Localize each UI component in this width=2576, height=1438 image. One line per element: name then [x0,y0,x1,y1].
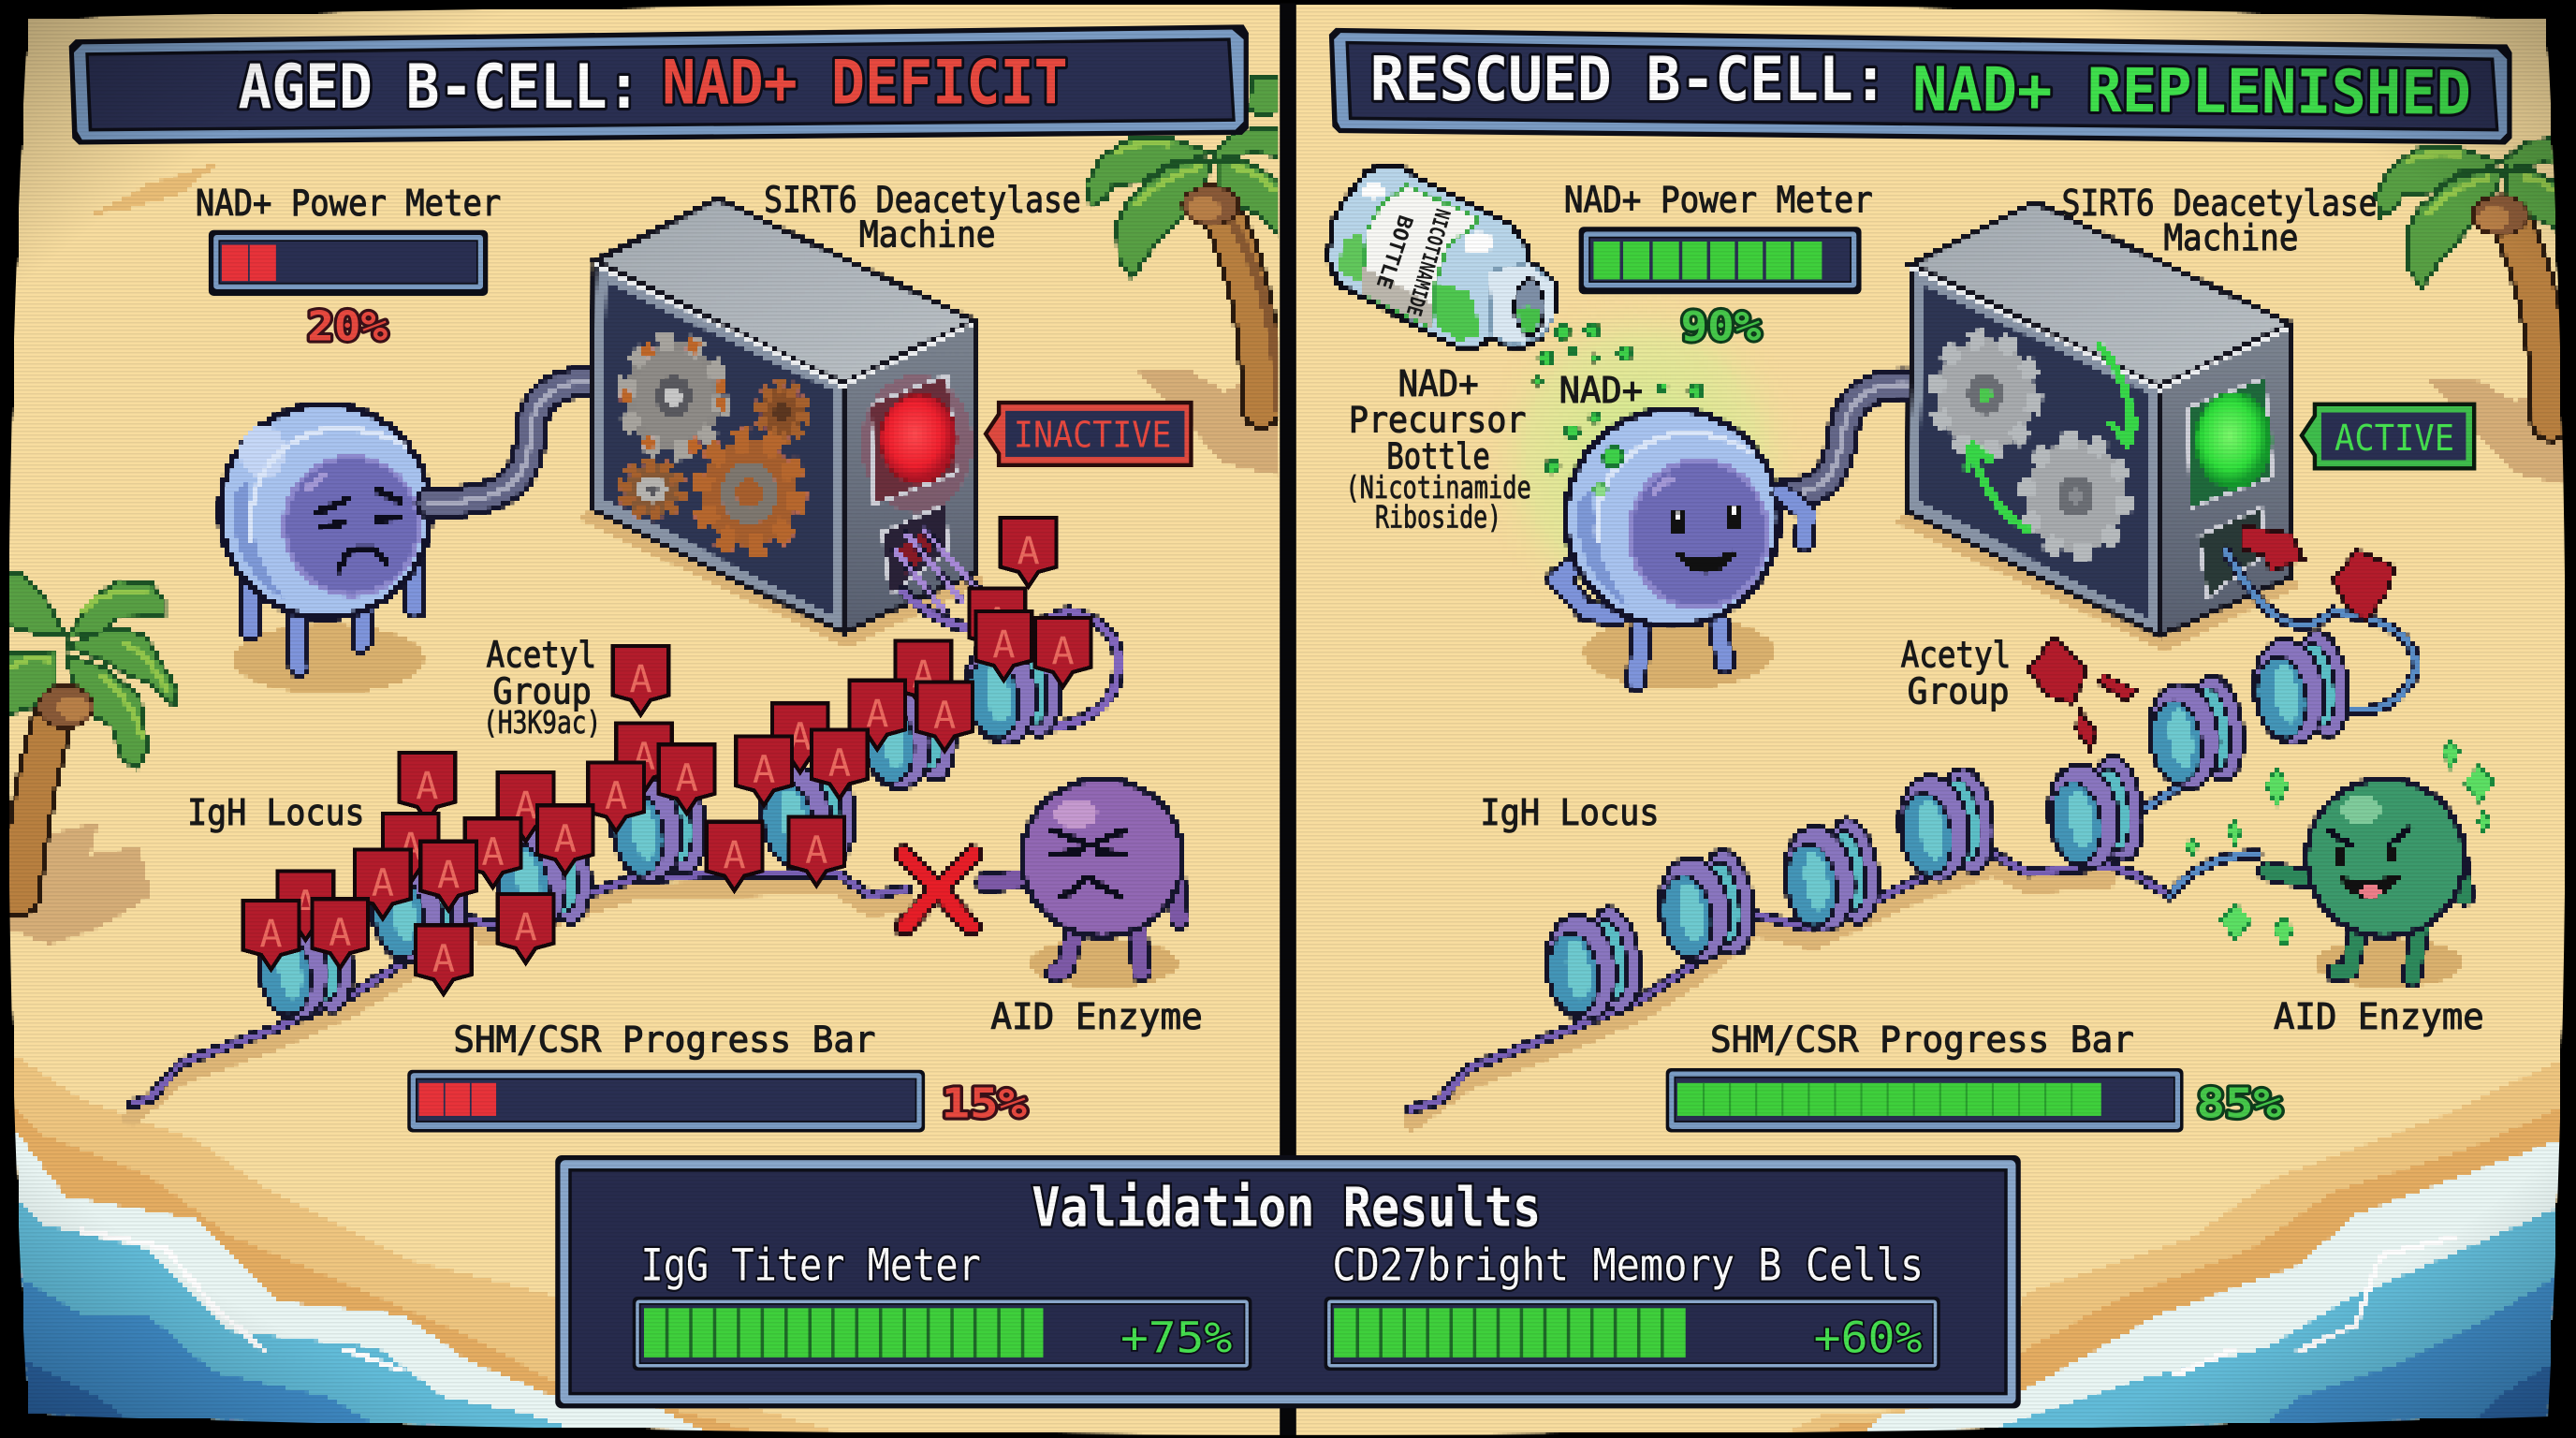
label: IgH locus: IgH Locus [1480,792,1660,834]
label: SIRT6 machine: Machine [859,213,996,256]
label: NAD+ power meter [196,183,501,350]
icon: angry purple AID enzyme [986,779,1183,988]
heading: aged B-cell NAD+ deficit: NAD+ DEFICIT [662,49,1068,119]
label: NAD+ power meter: NAD+ Power Meter [196,183,501,225]
green glow around rescued cell [1479,287,1808,633]
heading: aged B-cell NAD+ deficit: AGED B-CELL: [238,52,640,123]
gears: rusted [624,342,803,547]
icon: happy green AID enzyme [2267,779,2465,988]
icon: SIRT6 machine, active [1895,202,2303,651]
left shoreline [14,1058,833,1432]
label: IgH locus: IgH Locus [187,792,365,834]
acetyl group tags covering chromatin: A [633,735,655,779]
acetyl group tags covering chromatin: A [753,748,775,792]
acetyl group tags covering chromatin: A [675,756,698,800]
label: NAD+ precursor bottle: Riboside) [1375,498,1501,535]
acetyl group tags covering chromatin: A [933,694,956,738]
progress: SHM/CSR 85 percent [1666,1019,2283,1132]
panel: rescued B-cell [1327,28,2512,1132]
acetyl group tags covering chromatin: A [723,833,746,877]
NAD+ particles [1534,324,1702,474]
status badge: active [2302,404,2474,468]
cable from cell to machine [1782,384,1912,542]
label: NAD+ molecules: NAD+ [1559,370,1643,412]
label: acetyl group: Group [493,670,592,712]
acetyl group tags covering chromatin: A [372,861,394,905]
meter: 90 percent [1579,227,1862,294]
label: NAD+ precursor bottle: (Nicotinamide [1345,469,1531,506]
acetyl group tags covering chromatin: A [416,764,438,808]
metric: IgG titer meter [633,1240,1251,1371]
label: SIRT6 machine: SIRT6 Deacetylase [2062,183,2378,225]
metric: CD27bright memory B cells: +60% [1814,1313,1922,1363]
label: AID enzyme: AID Enzyme [990,996,1203,1038]
acetyl group tags covering chromatin: A [1017,529,1040,573]
acetyl group tags covering chromatin: A [514,784,537,828]
chromatin: open IgH locus with nucleosomes [1412,550,2416,1123]
icon: blocked red X [903,855,973,927]
icon: sad B-cell character [220,404,431,694]
acetyl group tags covering chromatin: A [437,853,460,897]
acetyl group tags covering chromatin: A [432,936,455,980]
metric: IgG titer meter: +75% [1120,1313,1232,1363]
label: AID enzyme: AID Enzyme [2274,996,2484,1038]
palm tree: aged panel bottom left [0,572,178,945]
green rotation arrows [1968,346,2135,529]
label: SIRT6 machine [764,179,1081,256]
label: acetyl group: Group [1908,670,2009,712]
label: acetyl group: (H3K9ac) [483,704,601,741]
panel: validation results [555,1155,2021,1408]
gears: spinning [1936,339,2125,552]
metric: CD27bright memory B cells [1325,1240,1940,1371]
acetyl group tags covering chromatin: A [514,905,537,949]
acetyl group tags covering chromatin [243,518,1090,994]
icon: nicotinamide bottle [1327,167,1556,346]
status badge: active: ACTIVE [2334,418,2454,460]
label: NAD+ power meter: NAD+ Power Meter [1564,179,1873,221]
label: NAD+ precursor bottle: NAD+ [1398,363,1479,405]
acetyl group tags covering chromatin: A [554,816,577,860]
acetyl group tags covering chromatin: A [481,829,505,873]
progress: SHM/CSR 15 percent: 15% [942,1080,1028,1128]
palm tree: aged panel top right [1086,76,1281,477]
label: NAD+ power meter: 90% [1680,302,1762,350]
acetyl group tags covering chromatin: A [992,623,1016,667]
center divider [1280,0,1296,1438]
progress: SHM/CSR 85 percent: 85% [2197,1080,2283,1128]
chromatin: IgH locus with nucleosomes [131,529,1119,1118]
acetyl group tags covering chromatin: A [259,912,283,956]
heading: rescued B-cell NAD+ replenished: NAD+ REPLENISHED [1912,55,2471,129]
acetyl group tags covering chromatin: A [629,657,652,701]
label: SIRT6 machine [2062,183,2378,259]
acetyl group tags covering chromatin: A [400,825,422,869]
label: NAD+ precursor bottle: Precursor [1349,400,1526,442]
label: NAD+ power meter: 20% [307,302,388,350]
panel: aged B-cell [69,24,1249,1132]
icon: green sparkles [2185,740,2494,946]
status badge: inactive [986,403,1191,465]
status badge: inactive: INACTIVE [1014,414,1171,456]
acetyl group tags covering chromatin: A [605,774,627,818]
acetyl group tags covering chromatin: A [805,829,827,873]
cable from cell to machine [431,381,594,503]
text on bottle label: NICOTINAMIDE [1401,206,1454,318]
acetyl group tags covering chromatin: A [294,883,317,927]
icon: SIRT6 machine, inactive [578,198,986,648]
right shoreline [1758,1051,2576,1438]
label: acetyl group [483,635,601,741]
progress: SHM/CSR 85 percent: SHM/CSR Progress Bar [1710,1019,2134,1061]
progress: SHM/CSR 15 percent: SHM/CSR Progress Bar [453,1019,875,1061]
heading: validation results: Validation Results [1032,1176,1541,1240]
heading: rescued B-cell NAD+ replenished [1329,28,2512,144]
label: acetyl group: Acetyl [487,635,596,677]
label: NAD+ precursor bottle [1345,363,1531,535]
label: SIRT6 machine: Machine [2163,217,2298,259]
metric: CD27bright memory B cells: CD27bright Memory B Cells [1332,1240,1924,1291]
label: NAD+ power meter [1564,179,1873,350]
label: acetyl group [1901,635,2011,712]
acetyl group tags covering chromatin: A [986,600,1009,644]
acetyl group tags covering chromatin: A [828,741,851,785]
acetyl group tags covering chromatin: A [912,653,935,697]
heading: aged B-cell NAD+ deficit [69,24,1249,144]
label: SIRT6 machine: SIRT6 Deacetylase [764,179,1081,221]
progress: SHM/CSR 15 percent [407,1019,1028,1132]
text on bottle label [1371,206,1454,318]
text on bottle label: BOTTLE [1371,213,1416,291]
acetyl group tags covering chromatin: A [789,714,812,758]
icon: detached acetyl fragments [2027,526,2395,749]
heading: rescued B-cell NAD+ replenished: RESCUED B-CELL: [1370,45,1888,115]
label: acetyl group: Acetyl [1901,635,2011,677]
label: NAD+ precursor bottle: Bottle [1386,435,1490,477]
metric: IgG titer meter: IgG Titer Meter [640,1240,981,1291]
meter: 20 percent [209,230,488,296]
palm tree: rescued panel top right [2376,138,2571,487]
acetyl group tags covering chromatin: A [866,692,888,736]
acetyl group tags covering chromatin: A [1051,629,1075,673]
acetyl group tags covering chromatin: A [329,910,351,954]
icon: happy B-cell character [1558,409,1779,689]
